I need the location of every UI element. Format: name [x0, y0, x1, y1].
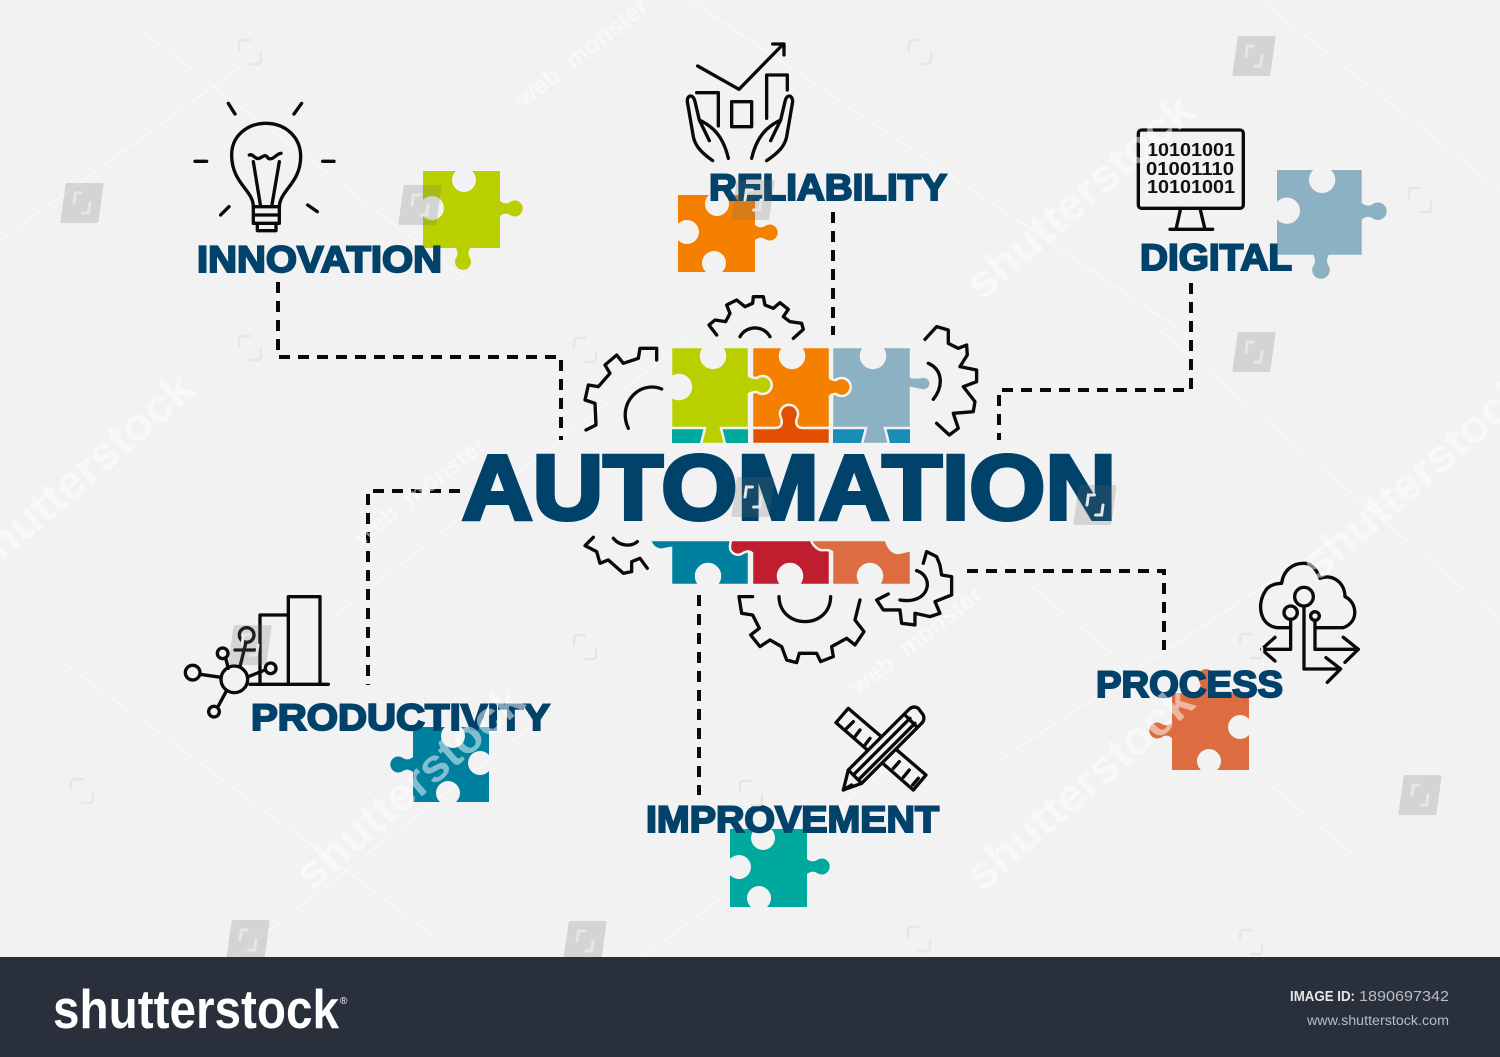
label: improvement: IMPROVEMENT: [646, 798, 939, 840]
central puzzle: bottom row: [650, 540, 911, 585]
gear: lower centre: [739, 597, 864, 663]
image id: 1890697342: [1359, 988, 1449, 1005]
piece: green: [671, 347, 772, 444]
piece: blue-teal: [650, 540, 749, 585]
label: digital: DIGITAL: [1140, 236, 1292, 278]
watermark text: shutterstock: [954, 674, 1204, 901]
icon: cloud process: [1261, 563, 1358, 682]
footer logo: shutterstock: [53, 978, 339, 1040]
gear: right: [925, 327, 977, 435]
puzzle piece: innovation: [423, 171, 523, 270]
icon: hands holding growth chart: [687, 44, 793, 161]
icon: monitor with binary: 10101001: [1147, 140, 1235, 160]
puzzle piece: productivity: [390, 727, 489, 802]
gear: lower left: [585, 537, 647, 573]
watermark text: shutterstock: [954, 83, 1204, 310]
registered mark: ®: [340, 996, 348, 1007]
gear: top: [709, 297, 803, 338]
icon: monitor with binary: 10101001: [1147, 177, 1235, 197]
puzzle piece: process: [1149, 669, 1249, 770]
watermark small logos: [71, 40, 1431, 954]
watermark text: shutterstock: [284, 673, 534, 900]
piece: grey-blue: [832, 347, 931, 444]
watermark text: web_monster: [844, 581, 988, 701]
footer bar: [0, 957, 1500, 1057]
piece: burnt orange: [811, 540, 911, 585]
gear: left: [585, 348, 662, 430]
title: automation: AUTOMATION: [462, 437, 1116, 539]
label: innovation: INNOVATION: [197, 238, 442, 280]
dashed connectors: [278, 212, 1191, 795]
piece: orange: [752, 347, 851, 428]
central gears: [585, 297, 977, 663]
icon: light bulb: [195, 103, 334, 231]
central puzzle: top row: [671, 347, 931, 444]
band: blue under grey-blue: [833, 428, 910, 443]
image id: IMAGE ID:: [1290, 988, 1355, 1005]
watermark text: web_monster: [348, 431, 492, 551]
piece: dark orange band: [752, 405, 830, 444]
puzzle piece: reliability: [678, 195, 778, 272]
label: productivity: PRODUCTIVITY: [251, 696, 550, 738]
website: www.shutterstock.com: [1306, 1012, 1449, 1028]
band: teal under green: [672, 428, 748, 443]
icon: network and bars: [185, 597, 328, 717]
icon: monitor with binary: [1138, 130, 1243, 229]
icon: ruler and pencil: [836, 707, 926, 790]
icon: monitor with binary: 01001110: [1146, 159, 1234, 179]
label: process: PROCESS: [1096, 663, 1283, 705]
label: reliability: RELIABILITY: [709, 166, 947, 208]
piece: red: [730, 540, 830, 585]
puzzle piece: improvement: [730, 829, 830, 907]
gear: lower right: [877, 552, 952, 625]
puzzle piece: digital: [1277, 170, 1387, 279]
